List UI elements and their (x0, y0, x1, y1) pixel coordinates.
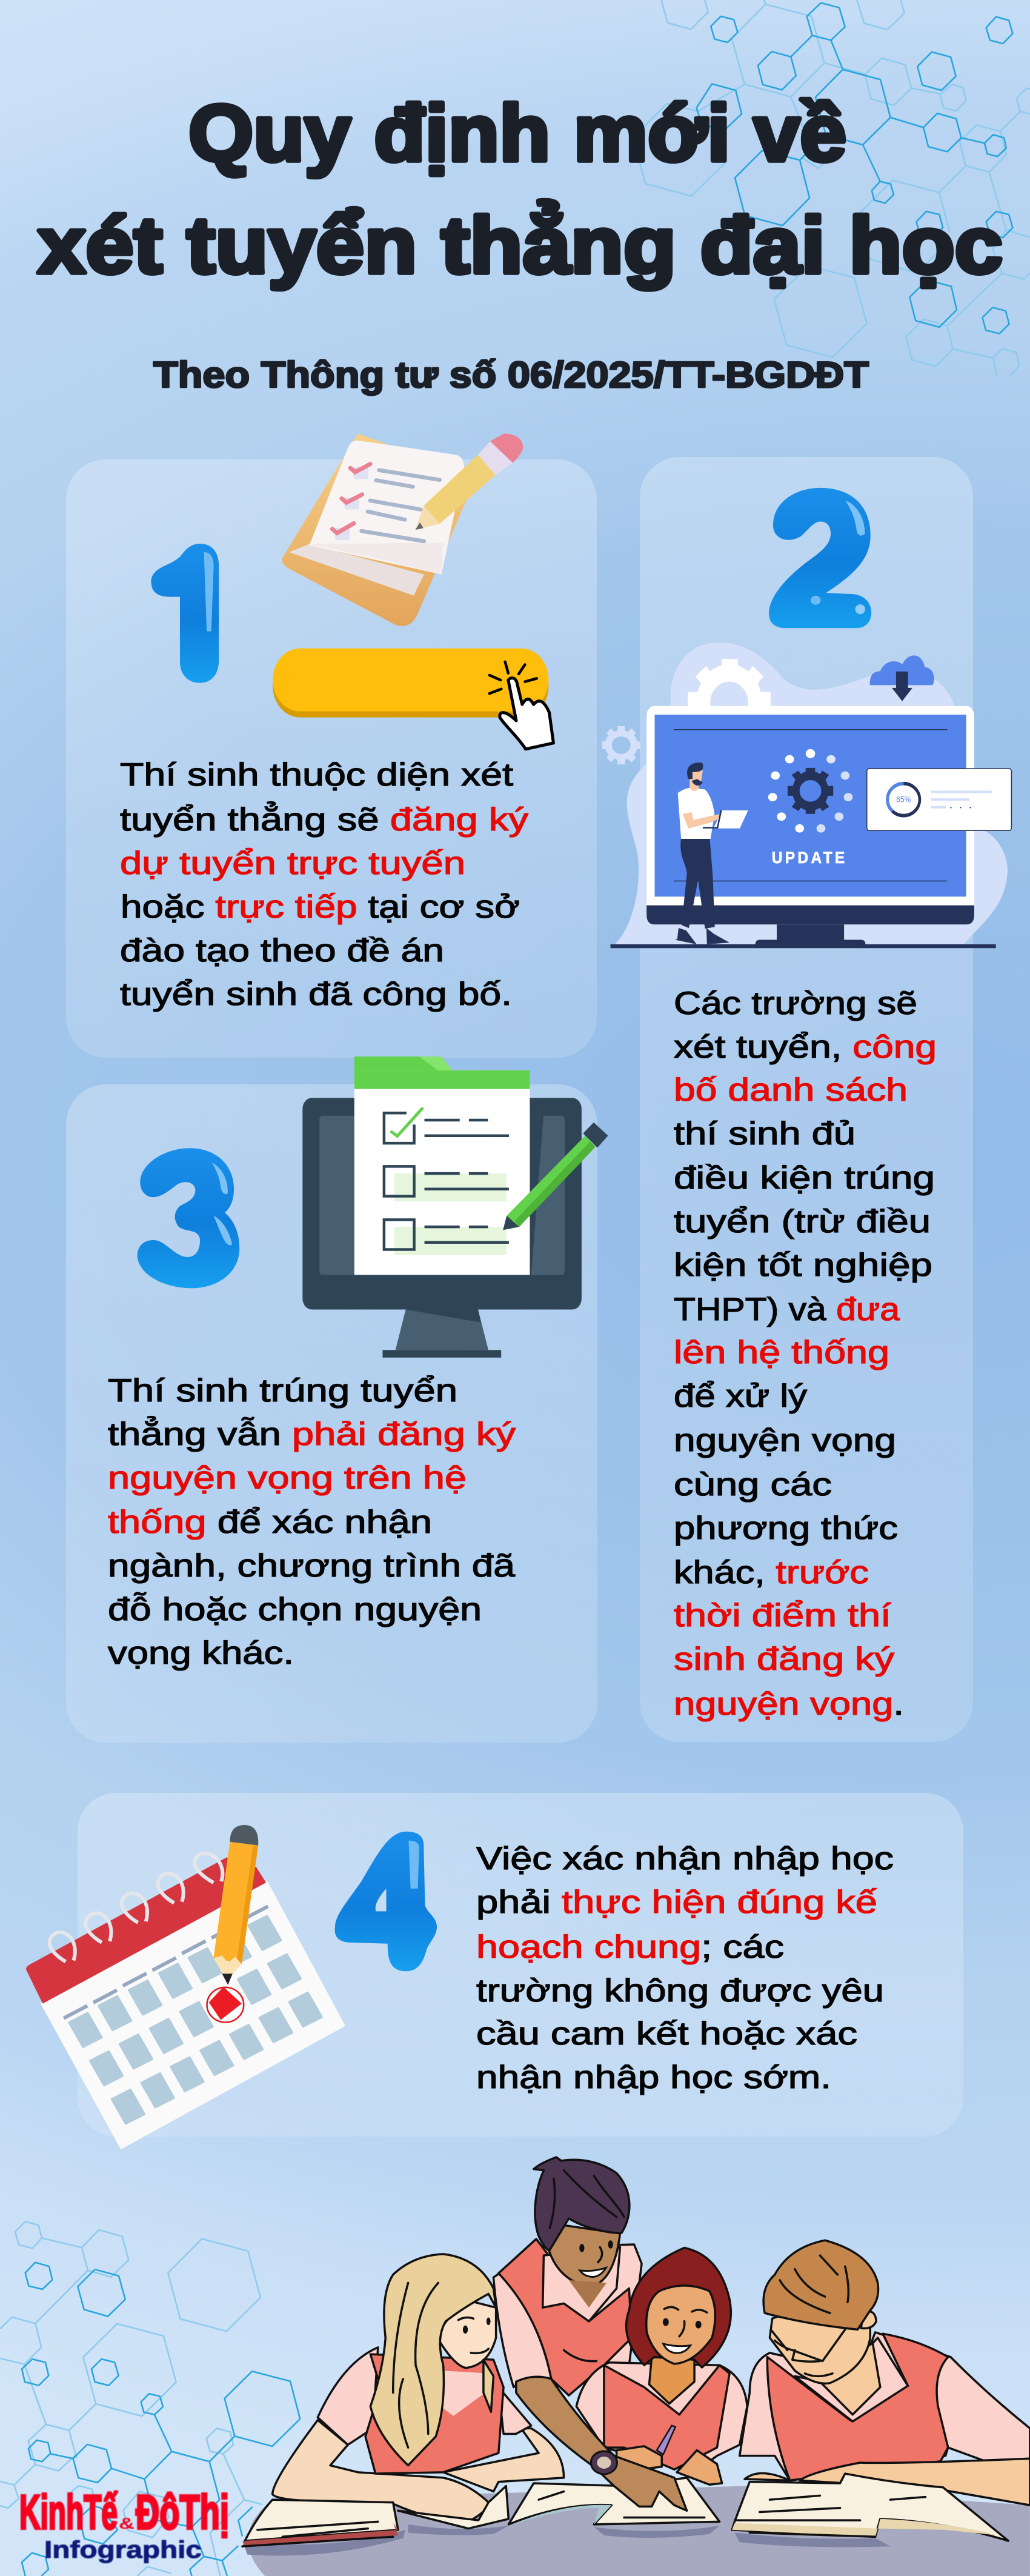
panel: step 4 (26, 1793, 963, 2147)
text: step 4 (476, 1841, 894, 2095)
books (242, 2474, 1008, 2546)
icon: number 1 (151, 544, 219, 683)
text: step 1: dự tuyển trực tuyến (120, 846, 465, 881)
text: step 2: bố danh sách (674, 1072, 908, 1108)
title: xét tuyển thẳng đại học (38, 200, 1003, 290)
subtitle: Theo Thông tư số 06/2025/TT-BGDĐT (153, 355, 869, 395)
text: step 1: tuyển thẳng sẽ đăng ký (120, 801, 529, 838)
progress card 65% (867, 769, 1011, 830)
text: step 3 (108, 1373, 516, 1671)
text: step 2: sinh đăng ký (674, 1641, 895, 1677)
illustration: computer update screen (602, 642, 1011, 948)
illustration: calendar with pencil (26, 1825, 343, 2147)
icon: small gear (602, 726, 640, 764)
illustration: students studying (242, 2157, 1030, 2576)
text: step 2: khác, trước (674, 1555, 869, 1590)
pointing arm (516, 2377, 687, 2511)
text: step 4: hoạch chung ; các (476, 1929, 784, 1965)
title (38, 88, 1003, 290)
student: red-haired girl (576, 2247, 747, 2484)
text: step 3: thống để xác nhận (108, 1504, 432, 1540)
text: step 2: để xử lý (674, 1378, 808, 1414)
text: step 1: đào tạo theo đề án (120, 933, 444, 969)
text: step 2 (674, 986, 937, 1722)
text: step 4: trường không được yêu (476, 1973, 884, 2009)
text: step 3: vọng khác. (108, 1635, 294, 1671)
text: step 2: lên hệ thống (674, 1335, 889, 1370)
icon: number 3 (138, 1148, 239, 1288)
student: back boy (493, 2157, 642, 2395)
label: UPDATE: UPDATE (772, 849, 848, 867)
text: step 3: đỗ hoặc chọn nguyện (108, 1592, 482, 1627)
title: Quy định mới về (188, 88, 846, 178)
text: step 1: hoặc trực tiếp tại cơ sở (121, 889, 520, 925)
logo: Kinh tế & Đô thị Infographic: Infographic (44, 2537, 202, 2563)
icon: checklist with pencil (282, 433, 523, 626)
text: step 4: Việc xác nhận nhập học (476, 1841, 894, 1877)
logo: Kinh tế & Đô thị Infographic: KinhTế (19, 2485, 118, 2539)
illustration: monitor with checklist (302, 1056, 608, 1358)
panel: step 1 (66, 433, 597, 1058)
rings (50, 1854, 222, 1961)
icon: cloud download (870, 655, 934, 701)
progress card 65%: 65% (896, 795, 911, 804)
text: step 2: thí sinh đủ (674, 1116, 856, 1152)
text: step 2: tuyển (trừ điều (674, 1204, 931, 1240)
text: step 2: kiện tốt nghiệp (674, 1247, 932, 1283)
logo: Kinh tế & Đô thị Infographic: ĐôThị (136, 2485, 229, 2539)
hexagon pattern: top right (633, 0, 1030, 376)
text: step 3: nguyện vọng trên hệ (108, 1460, 467, 1496)
logo: Kinh tế & Đô thị Infographic (19, 2485, 229, 2563)
text: step 4: nhận nhập học sớm. (476, 2060, 831, 2095)
text: step 4: cầu cam kết hoặc xác (476, 2016, 857, 2052)
text: step 1: tuyển sinh đã công bố. (120, 976, 512, 1012)
text: step 2: thời điểm thí (674, 1598, 891, 1633)
text: step 2: nguyện vọng (674, 1423, 896, 1458)
text: step 2: cùng các (674, 1467, 832, 1503)
text: step 3: ngành, chương trình đã (108, 1548, 516, 1584)
table (242, 2486, 1030, 2576)
text: step 2: THPT) và đưa (674, 1292, 900, 1327)
icon: number 4 (335, 1832, 437, 1971)
text: step 4: phải thực hiện đúng kế (476, 1884, 877, 1920)
icon: loading gear (788, 768, 833, 814)
icon: number 2 (769, 488, 871, 628)
student: boy with glasses (740, 2240, 1030, 2505)
logo: Kinh tế & Đô thị Infographic: & (119, 2514, 135, 2532)
figure: man with laptop (675, 762, 748, 944)
pencil (213, 1825, 258, 1985)
student: blonde girl (273, 2254, 564, 2521)
text: step 3: Thí sinh trúng tuyển (108, 1373, 457, 1409)
icon: large gear (688, 659, 771, 732)
text: step 2: Các trường sẽ (674, 986, 917, 1021)
text: step 2: nguyện vọng . (674, 1686, 904, 1722)
text: step 2: điều kiện trúng (674, 1160, 935, 1196)
text: step 2: xét tuyển, công (674, 1029, 937, 1065)
text: step 3: thẳng vẫn phải đăng ký (108, 1416, 516, 1452)
text: step 1 (120, 757, 529, 1012)
hexagon pattern: bottom left (0, 2221, 300, 2576)
panel: step 3 (66, 1056, 608, 1743)
text: step 2: phương thức (674, 1510, 898, 1546)
loading dots (768, 749, 852, 833)
date marker (207, 1987, 244, 2022)
text: step 1: Thí sinh thuộc diện xét (120, 757, 513, 793)
button with hand cursor (273, 649, 553, 749)
